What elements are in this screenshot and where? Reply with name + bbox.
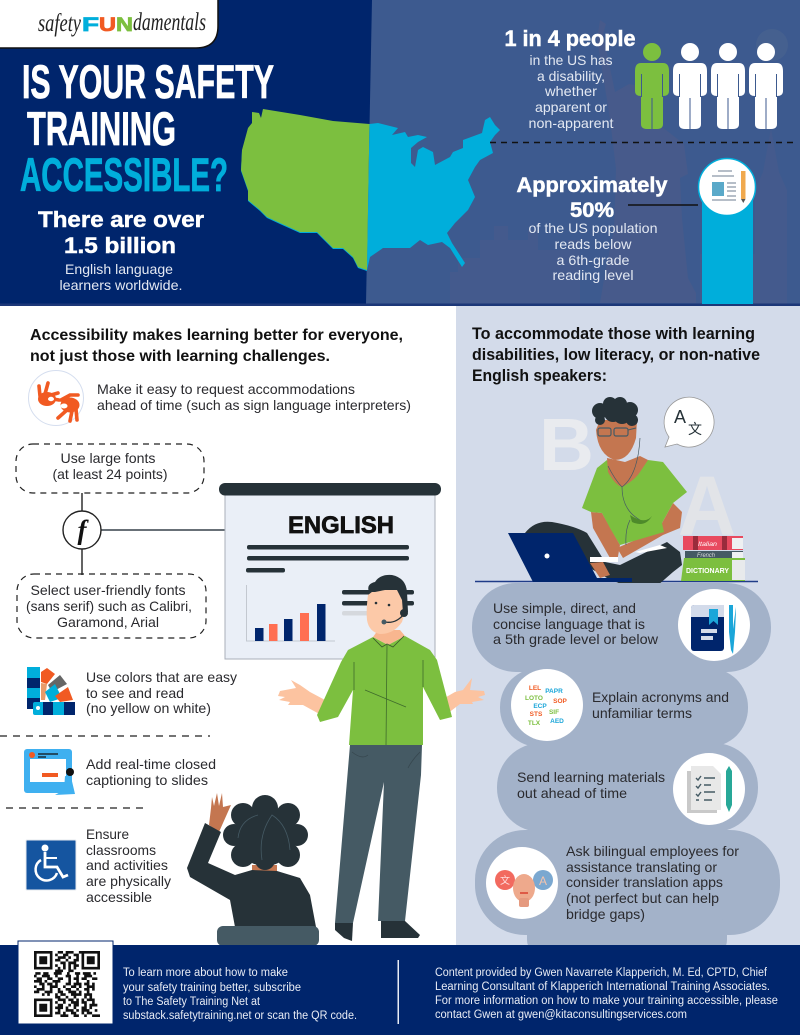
title: TRAINING [27, 102, 176, 155]
text: captioning [86, 757, 216, 788]
QR code [18, 941, 113, 1024]
icon: acronyms: ECP [533, 703, 547, 710]
pill text: simple language: Use simple, direct, and [493, 601, 636, 616]
pill text: send materials: Send learning materials [517, 770, 665, 785]
left heading: not just those with learning challenges. [30, 348, 330, 365]
icon: bilingual head [486, 847, 558, 919]
stat: 1 in 4 people: whether [544, 83, 597, 99]
stat: approximately 50%: Approximately [516, 174, 668, 197]
panel: footer [0, 945, 800, 1035]
callout: reading level column with newspaper icon [628, 158, 756, 304]
icon: font symbol with connectors: f [78, 515, 90, 545]
icon: wheelchair accessibility sign [26, 840, 76, 890]
illustration: learner with laptop and dictionaries [475, 397, 758, 588]
box: user-friendly fonts [17, 574, 206, 638]
stat: 1 in 4 people: a disability, [537, 68, 605, 84]
title [20, 55, 274, 201]
icon: acronyms: LEL [529, 685, 541, 692]
panel: right background [456, 306, 800, 946]
icon: four people, one highlighted [635, 43, 783, 129]
left heading: Accessibility makes learning better for everyone, [30, 327, 403, 344]
stat: English language learners: 1.5 billion [64, 233, 176, 258]
illustration: learner with laptop and dictionaries: A [678, 459, 736, 553]
stat: 1 in 4 people: apparent or [535, 99, 607, 115]
right heading [472, 325, 760, 385]
text: accommodations: ahead of time (such as sign language interpreters) [97, 398, 411, 413]
right heading: To accommodate those with learning [472, 325, 755, 343]
text: accommodations [97, 382, 411, 413]
stat: approximately 50%: reads below [554, 236, 632, 252]
footer text: subscribe: To learn more about how to make [123, 967, 288, 979]
stat: approximately 50%: reading level [552, 267, 634, 283]
stat: English language learners [38, 207, 204, 293]
text: accommodations: Make it easy to request accommodations [97, 382, 355, 397]
icon: acronyms: SIF [549, 709, 559, 716]
left heading [30, 327, 403, 365]
footer text: subscribe [123, 967, 357, 1022]
icon: translation speech bubble: 文 [688, 421, 702, 437]
icon: acronyms: AED [550, 718, 564, 725]
text: colors [86, 670, 237, 716]
logo: F [82, 15, 99, 36]
icon: bilingual head: A [539, 874, 547, 888]
pill text: simple language: a 5th grade level or below [493, 632, 658, 647]
box: user-friendly fonts: Garamond, Arial [57, 615, 159, 630]
text: physically accessible: classrooms [86, 843, 156, 858]
illustration: learner with laptop and dictionaries: DICTIONARY [686, 568, 729, 575]
stat: English language learners: learners worldwide. [60, 277, 182, 293]
text: physically accessible: Ensure [86, 827, 129, 842]
pill text: bilingual employees: consider translation apps [566, 875, 723, 890]
illustration: audience member raising hand [187, 793, 319, 946]
icon: translation speech bubble [664, 397, 714, 447]
icon: translation speech bubble: A [674, 407, 686, 427]
icon: acronyms: STS [530, 711, 543, 718]
pill text: simple language: concise language that is [493, 617, 645, 632]
stat: 1 in 4 people: non-apparent [528, 115, 614, 131]
icon: closed captioning slide [24, 749, 75, 795]
pill text: bilingual employees: bridge gaps) [566, 907, 645, 922]
pill text: simple language [493, 601, 658, 647]
illustration: learner with laptop and dictionaries: B [539, 403, 594, 486]
right heading: disabilities, low literacy, or non-native [472, 346, 760, 364]
stat: English language learners: There are over [38, 207, 204, 232]
pill text: send materials: out ahead of time [517, 786, 627, 801]
title: IS YOUR SAFETY [22, 55, 274, 108]
icon: book and pen [678, 589, 750, 661]
map of the United States [241, 109, 500, 271]
footer text: credits: Content provided by Gwen Navarrete Klapperich, M. Ed, CPTD, Chief [435, 967, 768, 979]
pill text: acronyms: Explain acronyms and [592, 690, 729, 705]
pill text: bilingual employees [566, 844, 739, 922]
pill text: acronyms: unfamiliar terms [592, 706, 692, 721]
icon: acronyms: PAPR [545, 688, 563, 695]
pill text: bilingual employees: (not perfect but can help [566, 891, 719, 906]
text: physically accessible: accessible [86, 890, 152, 905]
footer text: credits: For more information on how to make your training accessible, please [435, 995, 778, 1007]
icon: acronyms: TLX [528, 720, 541, 727]
right heading: English speakers: [472, 367, 607, 385]
illustration: learner with laptop and dictionaries: French [697, 553, 716, 559]
logo [0, 0, 218, 48]
logo: safety [38, 10, 82, 37]
icon: sign language [28, 370, 84, 426]
icon: acronyms [511, 669, 583, 741]
text: physically accessible: and activities [86, 858, 168, 873]
box: large fonts: (at least 24 points) [52, 467, 168, 482]
projection screen [219, 483, 441, 659]
box: large fonts [16, 444, 204, 493]
footer text: credits: Learning Consultant of Klapperich International Training Associates. [435, 981, 770, 993]
icon: acronyms: SOP [553, 698, 568, 705]
pill text: bilingual employees: Ask bilingual employees for [566, 844, 739, 859]
text: physically accessible: are physically [86, 874, 171, 889]
box: user-friendly fonts: (sans serif) such as Calibri, [26, 599, 192, 614]
stat: 1 in 4 people [504, 26, 636, 131]
text: colors: to see and read [86, 686, 184, 701]
footer text: subscribe: substack.safetytraining.net or scan the QR code. [123, 1010, 357, 1022]
pill text: send materials [517, 770, 665, 801]
panel: header background [0, 0, 800, 306]
footer text: credits: contact Gwen at gwen@kitaconsultingservices.com [435, 1009, 687, 1021]
box: user-friendly fonts: Select user-friendly fonts [30, 583, 186, 598]
text: physically accessible [86, 827, 171, 905]
projection screen: ENGLISH [288, 512, 394, 539]
stat: 1 in 4 people: 1 in 4 people [504, 26, 636, 51]
footer text: subscribe: to The Safety Training Net at [123, 996, 261, 1008]
stat: approximately 50%: a 6th-grade [556, 252, 630, 268]
icon: bilingual head: 文 [500, 874, 510, 887]
illustration: learner with laptop and dictionaries: Italian [698, 542, 718, 548]
pill text: acronyms [592, 690, 729, 721]
icon: acronyms: LOTO [525, 695, 543, 702]
logo: N [116, 15, 133, 36]
logo: damentals [133, 9, 206, 36]
stat: 1 in 4 people: in the US has [530, 52, 612, 68]
text: colors: (no yellow on white) [86, 701, 211, 716]
stat: approximately 50%: of the US population [528, 220, 658, 236]
box: large fonts: Use large fonts [60, 451, 156, 466]
footer text: credits [435, 967, 778, 1021]
pill text: bilingual employees: assistance translating or [566, 860, 717, 875]
logo: U [99, 15, 116, 36]
footer text: subscribe: your safety training better, subscribe [123, 982, 301, 994]
icon: font symbol with connectors [63, 493, 285, 575]
icon: checklist and marker [673, 753, 745, 825]
illustration: presenter [278, 575, 485, 941]
icon: colour swatches [27, 667, 75, 715]
stat: English language learners: English language [65, 261, 173, 277]
text: captioning: captioning to slides [86, 773, 208, 788]
title: ACCESSIBLE? [20, 148, 228, 201]
text: colors: Use colors that are easy [86, 670, 237, 685]
text: captioning: Add real-time closed [86, 757, 216, 772]
stat: approximately 50% [516, 174, 668, 283]
stat: approximately 50%: 50% [570, 199, 614, 222]
panel: recommendation pills [472, 583, 780, 955]
